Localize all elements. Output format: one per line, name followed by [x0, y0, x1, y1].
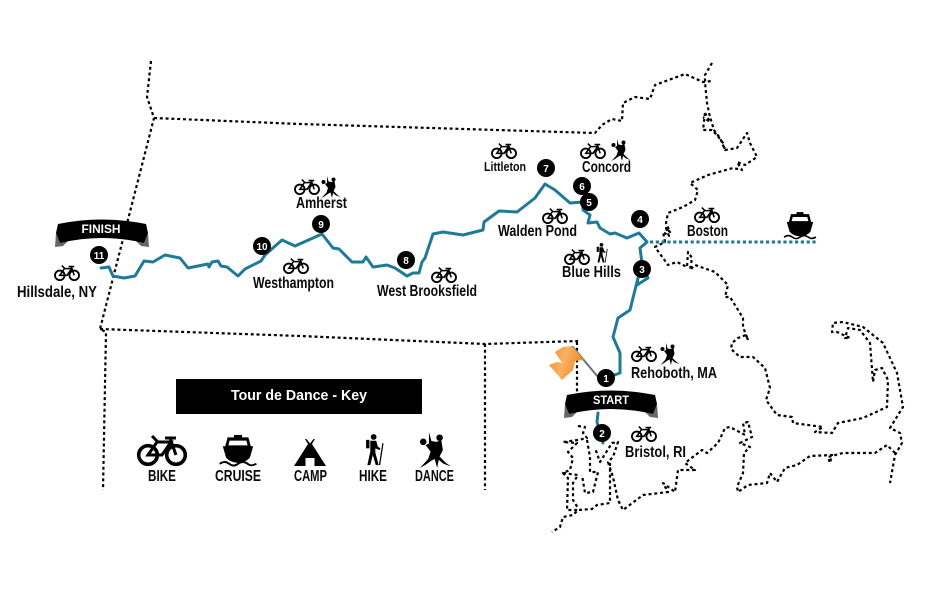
key item: dance: DANCE [415, 468, 454, 485]
stop 3: 3 [639, 265, 645, 276]
stop 5 [580, 193, 598, 211]
stop 10 [253, 237, 271, 255]
border: southern coast [595, 422, 895, 510]
key item: dance [415, 432, 454, 485]
location: Amherst: Amherst [296, 195, 347, 212]
location: Westhampton [253, 259, 334, 292]
location: West Brooksfield [377, 268, 477, 300]
stop 1 [597, 369, 615, 387]
banner: finish [55, 220, 149, 247]
stop 7: 7 [543, 164, 549, 175]
key item: camp: CAMP [294, 468, 327, 485]
location: Hillsdale, NY [17, 266, 98, 301]
banner: start: START [593, 393, 630, 407]
border: Massachusetts south line [100, 329, 578, 490]
location: Rehoboth, MA: Rehoboth, MA [631, 365, 717, 382]
key item: bike: BIKE [148, 468, 176, 485]
location: Westhampton: Westhampton [253, 275, 334, 292]
border: Cape Cod and south shore [731, 322, 903, 483]
stop 8: 8 [403, 256, 409, 267]
stop 7 [537, 159, 555, 177]
location: Bristol, RI [625, 427, 686, 461]
flag: start marker [549, 346, 598, 380]
location: Bristol, RI: Bristol, RI [625, 444, 686, 461]
location: Boston [687, 208, 728, 240]
map: state borders and coastline [100, 61, 903, 532]
location: Concord [581, 139, 631, 176]
location: Amherst [295, 176, 347, 212]
location: Boston: Boston [687, 223, 728, 240]
stop 10: 10 [256, 242, 268, 253]
key item: hike [359, 434, 387, 485]
stop 4 [631, 210, 649, 228]
border: New York and Vermont line [100, 61, 154, 490]
border: north shore inlet loop [703, 113, 725, 150]
location: Walden Pond: Walden Pond [498, 223, 577, 240]
stop 9: 9 [318, 220, 324, 231]
key heading: Tour de Dance - Key [231, 388, 367, 404]
location: Littleton [484, 144, 526, 174]
key heading [176, 379, 422, 414]
border: northern Massachusetts line and north shore [154, 63, 757, 340]
location: Hillsdale, NY: Hillsdale, NY [17, 284, 98, 301]
stop 4: 4 [637, 215, 643, 226]
location: West Brooksfield: West Brooksfield [377, 283, 477, 300]
banner: start [564, 390, 658, 418]
stop 11: 11 [94, 251, 105, 262]
route: blue tour path [101, 184, 648, 443]
location: Concord: Concord [582, 159, 631, 176]
key item: cruise: CRUISE [215, 468, 261, 485]
stop markers 1 to 11 [90, 159, 651, 442]
key item: cruise [215, 435, 261, 485]
border: Narragansett Bay [552, 426, 610, 532]
location: Blue Hills: Blue Hills [562, 264, 621, 281]
stop 11 [90, 246, 108, 264]
stop 1: 1 [603, 374, 609, 385]
key item: bike [139, 436, 185, 485]
stop 6: 6 [579, 182, 585, 193]
location: Blue Hills [562, 243, 621, 281]
location: Littleton: Littleton [484, 160, 526, 174]
stop 5: 5 [586, 198, 592, 209]
panel: key [139, 379, 454, 485]
stop 9 [312, 215, 330, 233]
location: Walden Pond [498, 209, 577, 240]
icon: cruise boat [784, 212, 816, 239]
key item: hike: HIKE [359, 468, 387, 485]
route: blue dotted cruise line [650, 240, 816, 244]
key item: camp [294, 439, 327, 485]
stop 2 [593, 424, 611, 442]
stop 2: 2 [599, 429, 605, 440]
stop 3 [633, 260, 651, 278]
location: Rehoboth, MA [631, 343, 717, 382]
stop 6 [573, 177, 591, 195]
banner: finish: FINISH [82, 222, 120, 236]
stop 8 [397, 251, 415, 269]
